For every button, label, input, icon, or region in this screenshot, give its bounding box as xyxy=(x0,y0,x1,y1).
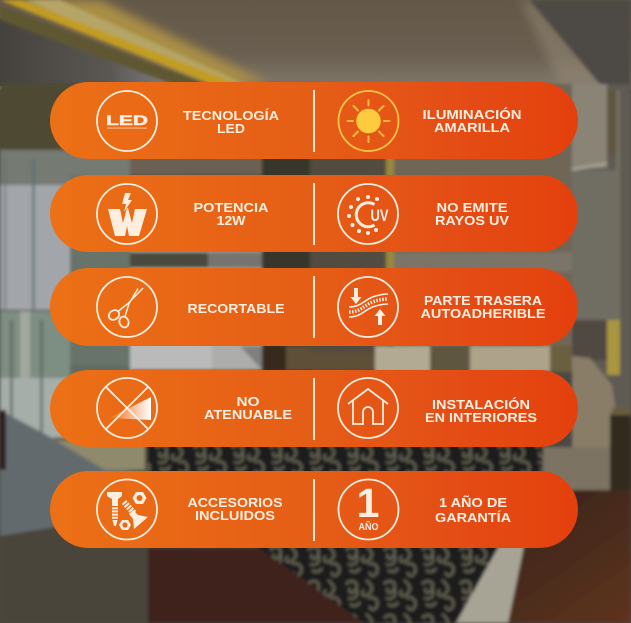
panel: row 3 xyxy=(50,268,578,346)
icon: no UV: UV xyxy=(370,206,389,225)
text: Tecnología LED: LED xyxy=(217,121,245,136)
icon: LED: LED xyxy=(106,112,148,128)
panel: row 1 xyxy=(50,82,578,159)
text: Recortable: RECORTABLE xyxy=(188,301,285,316)
icon: one year: 1 xyxy=(357,480,379,526)
text: No atenuable: NO xyxy=(236,394,260,409)
left window and curtains xyxy=(0,84,132,154)
text: Potencia 12W: 12W xyxy=(216,213,246,228)
icon: one year: AÑO xyxy=(358,520,379,533)
icon: adhesive strip xyxy=(338,277,398,337)
floor xyxy=(440,490,631,623)
text: No emite rayos UV: RAYOS UV xyxy=(435,213,509,228)
headboard and pillows xyxy=(375,346,435,372)
panel: row 5 xyxy=(50,471,578,548)
text: Parte trasera autoadherible: PARTE TRASERA xyxy=(424,293,543,308)
text: No atenuable: ATENUABLE xyxy=(204,407,292,422)
text: Accesorios incluidos: INCLUIDOS xyxy=(195,508,275,523)
lower left: desk and floor xyxy=(0,440,148,623)
text: Potencia 12W: POTENCIA xyxy=(194,200,269,215)
text: Instalación en interiores: INSTALACIÓN xyxy=(432,397,530,412)
text: Accesorios incluidos: ACCESORIOS xyxy=(188,495,283,510)
icon: house xyxy=(338,378,398,438)
icon: one year xyxy=(338,480,398,540)
bedspread xyxy=(148,445,543,475)
icon: accessories xyxy=(97,480,157,540)
text: 1 año de garantía: 1 AÑO DE xyxy=(439,495,507,510)
panel: row 2 xyxy=(50,175,578,252)
icon: LED xyxy=(97,91,157,151)
text: No emite rayos UV: NO EMITE xyxy=(436,200,508,215)
icon: no UV xyxy=(338,184,398,244)
icon: sun xyxy=(338,91,398,151)
text: 1 año de garantía: GARANTÍA xyxy=(435,510,512,525)
icon: scissors xyxy=(97,277,157,337)
text: Parte trasera autoadherible: AUTOADHERIBLE xyxy=(420,306,546,321)
icon: not dimmable xyxy=(97,378,157,438)
mid walls xyxy=(130,84,265,204)
right wall, picture and headboard xyxy=(572,84,631,424)
text: Instalación en interiores: EN INTERIORES xyxy=(425,410,537,425)
text: Iluminación amarilla: ILUMINACIÓN xyxy=(422,107,522,122)
text: Iluminación amarilla: AMARILLA xyxy=(434,120,511,135)
text: Tecnología LED: TECNOLOGÍA xyxy=(183,108,280,123)
icon: 12W power xyxy=(97,184,157,244)
panel: row 4 xyxy=(50,370,578,447)
